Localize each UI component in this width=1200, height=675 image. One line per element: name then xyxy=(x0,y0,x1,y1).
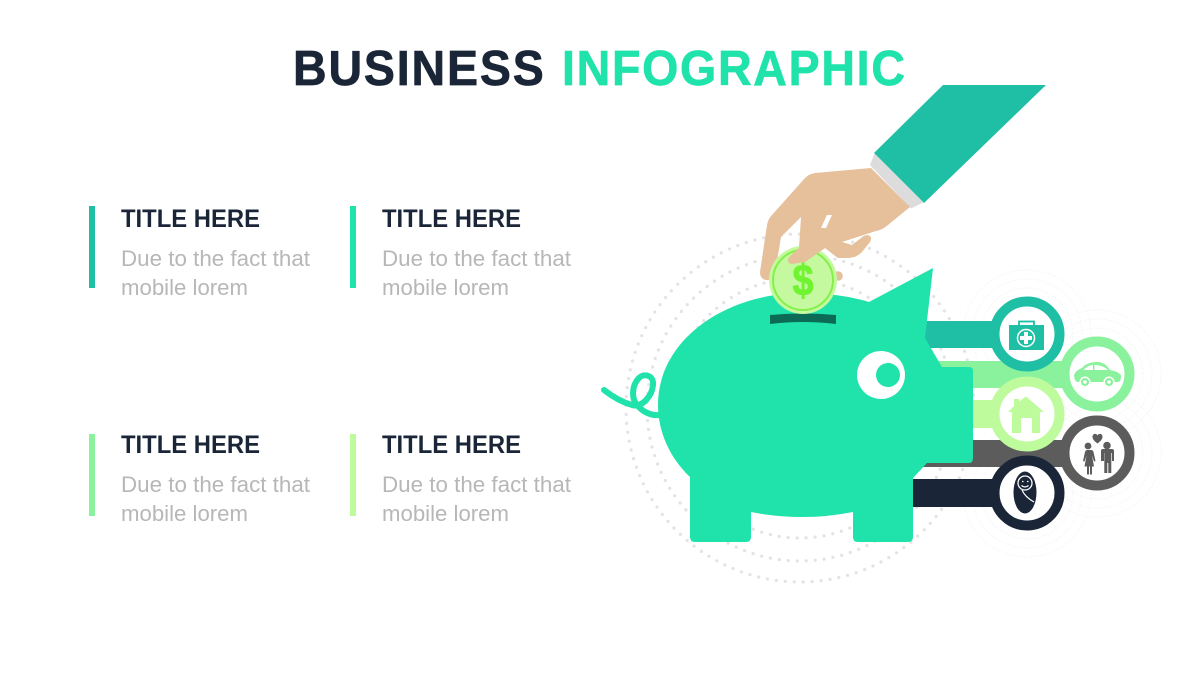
text block: bottom left: mobile lorem xyxy=(121,501,248,526)
text block: top left xyxy=(89,205,310,300)
pig eye xyxy=(857,351,905,399)
icon: baby xyxy=(1014,472,1036,514)
text block: bottom right xyxy=(350,431,571,526)
connector: baby xyxy=(905,460,1060,526)
text block: top right: Due to the fact that xyxy=(382,246,571,271)
text block: bottom left: TITLE HERE xyxy=(121,431,260,459)
icon: medical kit xyxy=(1009,322,1044,350)
text block: top left: Due to the fact that xyxy=(121,246,310,271)
title: BUSINESS xyxy=(293,42,544,96)
coin slot xyxy=(770,314,836,324)
pig tail xyxy=(604,375,660,415)
coin xyxy=(769,246,837,314)
sleeve xyxy=(874,85,1046,203)
hand xyxy=(760,168,910,280)
pig body xyxy=(658,268,973,542)
thumb tip behind coin xyxy=(833,271,843,281)
text block: top left: TITLE HERE xyxy=(121,205,260,233)
cuff xyxy=(870,154,924,208)
connector: family xyxy=(920,420,1130,486)
connector: car xyxy=(930,342,1130,406)
text block: top right xyxy=(350,205,571,300)
text block: top right: TITLE HERE xyxy=(382,205,521,233)
text block: bottom left xyxy=(89,431,310,526)
thin dotted rings around icons xyxy=(963,270,1161,557)
connector: home xyxy=(960,382,1060,446)
icon: couple xyxy=(1083,434,1114,474)
title xyxy=(293,42,905,96)
pig xyxy=(604,268,973,542)
arm and hand xyxy=(760,85,1046,281)
dotted rings around pig xyxy=(626,234,974,582)
connector: medical xyxy=(915,302,1060,366)
text block: top right: mobile lorem xyxy=(382,275,509,300)
text block: bottom right: TITLE HERE xyxy=(382,431,521,459)
text block: bottom left: Due to the fact that xyxy=(121,472,310,497)
text block: top left: mobile lorem xyxy=(121,275,248,300)
title: INFOGRAPHIC xyxy=(562,42,905,96)
finger over coin xyxy=(788,225,850,264)
icon: car xyxy=(1074,362,1121,387)
coin: $ xyxy=(793,256,814,305)
text block: bottom right: Due to the fact that xyxy=(382,472,571,497)
icon: house xyxy=(1008,396,1044,433)
text block: bottom right: mobile lorem xyxy=(382,501,509,526)
finger gap xyxy=(821,215,832,228)
